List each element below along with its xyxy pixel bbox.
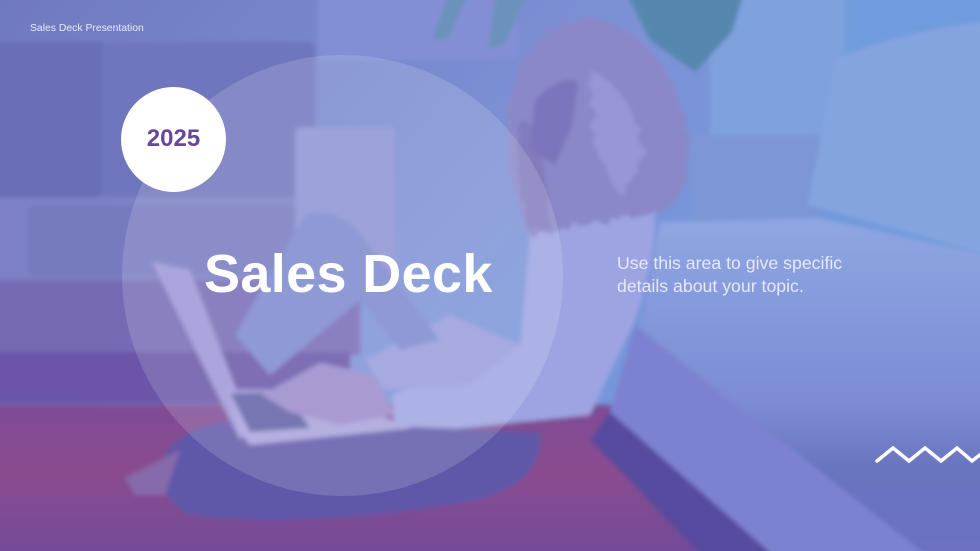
sweater [392, 184, 655, 435]
foot [125, 450, 180, 495]
right sofa front [610, 325, 945, 551]
left sofa [0, 42, 105, 197]
icon: zigzag line [875, 446, 980, 464]
plant [432, 0, 530, 50]
year badge [121, 87, 226, 192]
face [530, 80, 578, 165]
description text [617, 253, 842, 296]
jeans [235, 213, 440, 375]
rug [0, 405, 780, 551]
hands [262, 363, 395, 425]
right sofa seat [640, 218, 980, 551]
laptop [152, 262, 250, 440]
wall / window [318, 0, 518, 60]
year text: 2025 [147, 125, 200, 152]
description text: details about your topic. [617, 276, 804, 296]
lower body [159, 420, 540, 520]
title: Sales Deck [204, 244, 493, 304]
curly hair [508, 18, 689, 235]
large translucent circle [122, 55, 563, 496]
description text: Use this area to give specific [617, 253, 842, 273]
right sofa back and arm [690, 135, 820, 225]
header label: Sales Deck Presentation [30, 23, 144, 34]
arm rest [295, 127, 395, 297]
